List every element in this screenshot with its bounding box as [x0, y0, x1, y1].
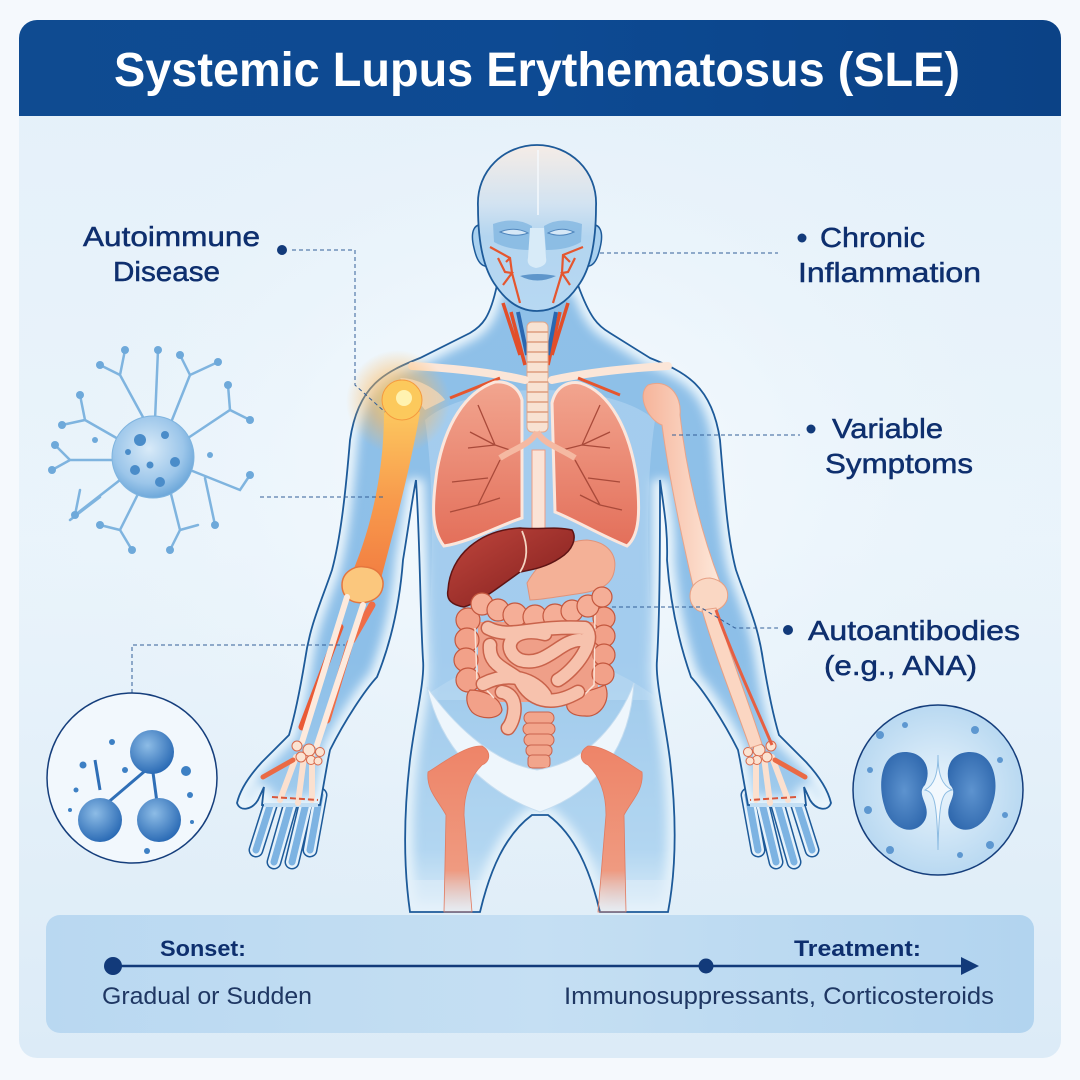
- treatment label: Treatment:: [794, 936, 921, 961]
- hand bones: [263, 741, 805, 803]
- title: Systemic Lupus Erythematosus (SLE): [114, 44, 960, 97]
- callout: autoantibodies: Autoantibodies: [808, 615, 1020, 646]
- inflamed arm (viewer left): [302, 350, 450, 745]
- intestines: [454, 587, 615, 768]
- label text: Autoimmune: [83, 221, 260, 252]
- treatment value: Immunosuppressants, Corticosteroids: [564, 983, 994, 1010]
- callout: autoimmune disease: [83, 221, 385, 412]
- lungs: [434, 382, 639, 546]
- small intestine loops: [483, 628, 589, 728]
- onset label: Sonset:: [160, 936, 246, 961]
- title banner: [19, 20, 1061, 116]
- callout: chronic inflammation: Inflammation: [798, 257, 981, 288]
- human body figure: [237, 145, 831, 914]
- pelvis: [427, 683, 634, 812]
- neck structures: [503, 303, 568, 432]
- facial inflammation vessels: [490, 247, 583, 303]
- icon: kidneys circle: [853, 705, 1023, 875]
- callout: variable symptoms: Symptoms: [825, 448, 973, 479]
- stomach: [527, 540, 615, 600]
- head: [472, 145, 602, 311]
- arm bones (viewer right): [643, 383, 772, 748]
- eye sockets: [493, 220, 582, 250]
- palm blend over finger joints: [264, 804, 804, 806]
- rectum: [523, 712, 555, 768]
- femurs: [428, 746, 642, 912]
- callout: chronic inflammation: [600, 222, 981, 288]
- colon transverse: [471, 587, 612, 629]
- bottom timeline panel: [46, 915, 1034, 1033]
- body silhouette: [237, 285, 831, 914]
- fingers: [256, 790, 812, 862]
- onset value: Gradual or Sudden: [102, 983, 312, 1010]
- callout: autoantibodies: [612, 607, 1020, 681]
- liver: [448, 528, 574, 607]
- label text: Disease: [113, 256, 220, 287]
- icon: immune cell with dendrites: [48, 346, 385, 554]
- icon: antibody cells circle: [47, 645, 345, 863]
- callout: variable symptoms: Variable: [832, 413, 943, 444]
- timeline arrow: [104, 957, 979, 975]
- collar bones: [412, 366, 668, 380]
- callout: chronic inflammation: Chronic: [820, 222, 925, 253]
- callout: variable symptoms: [672, 413, 973, 479]
- callout: autoantibodies: (e.g., ANA): [824, 650, 977, 681]
